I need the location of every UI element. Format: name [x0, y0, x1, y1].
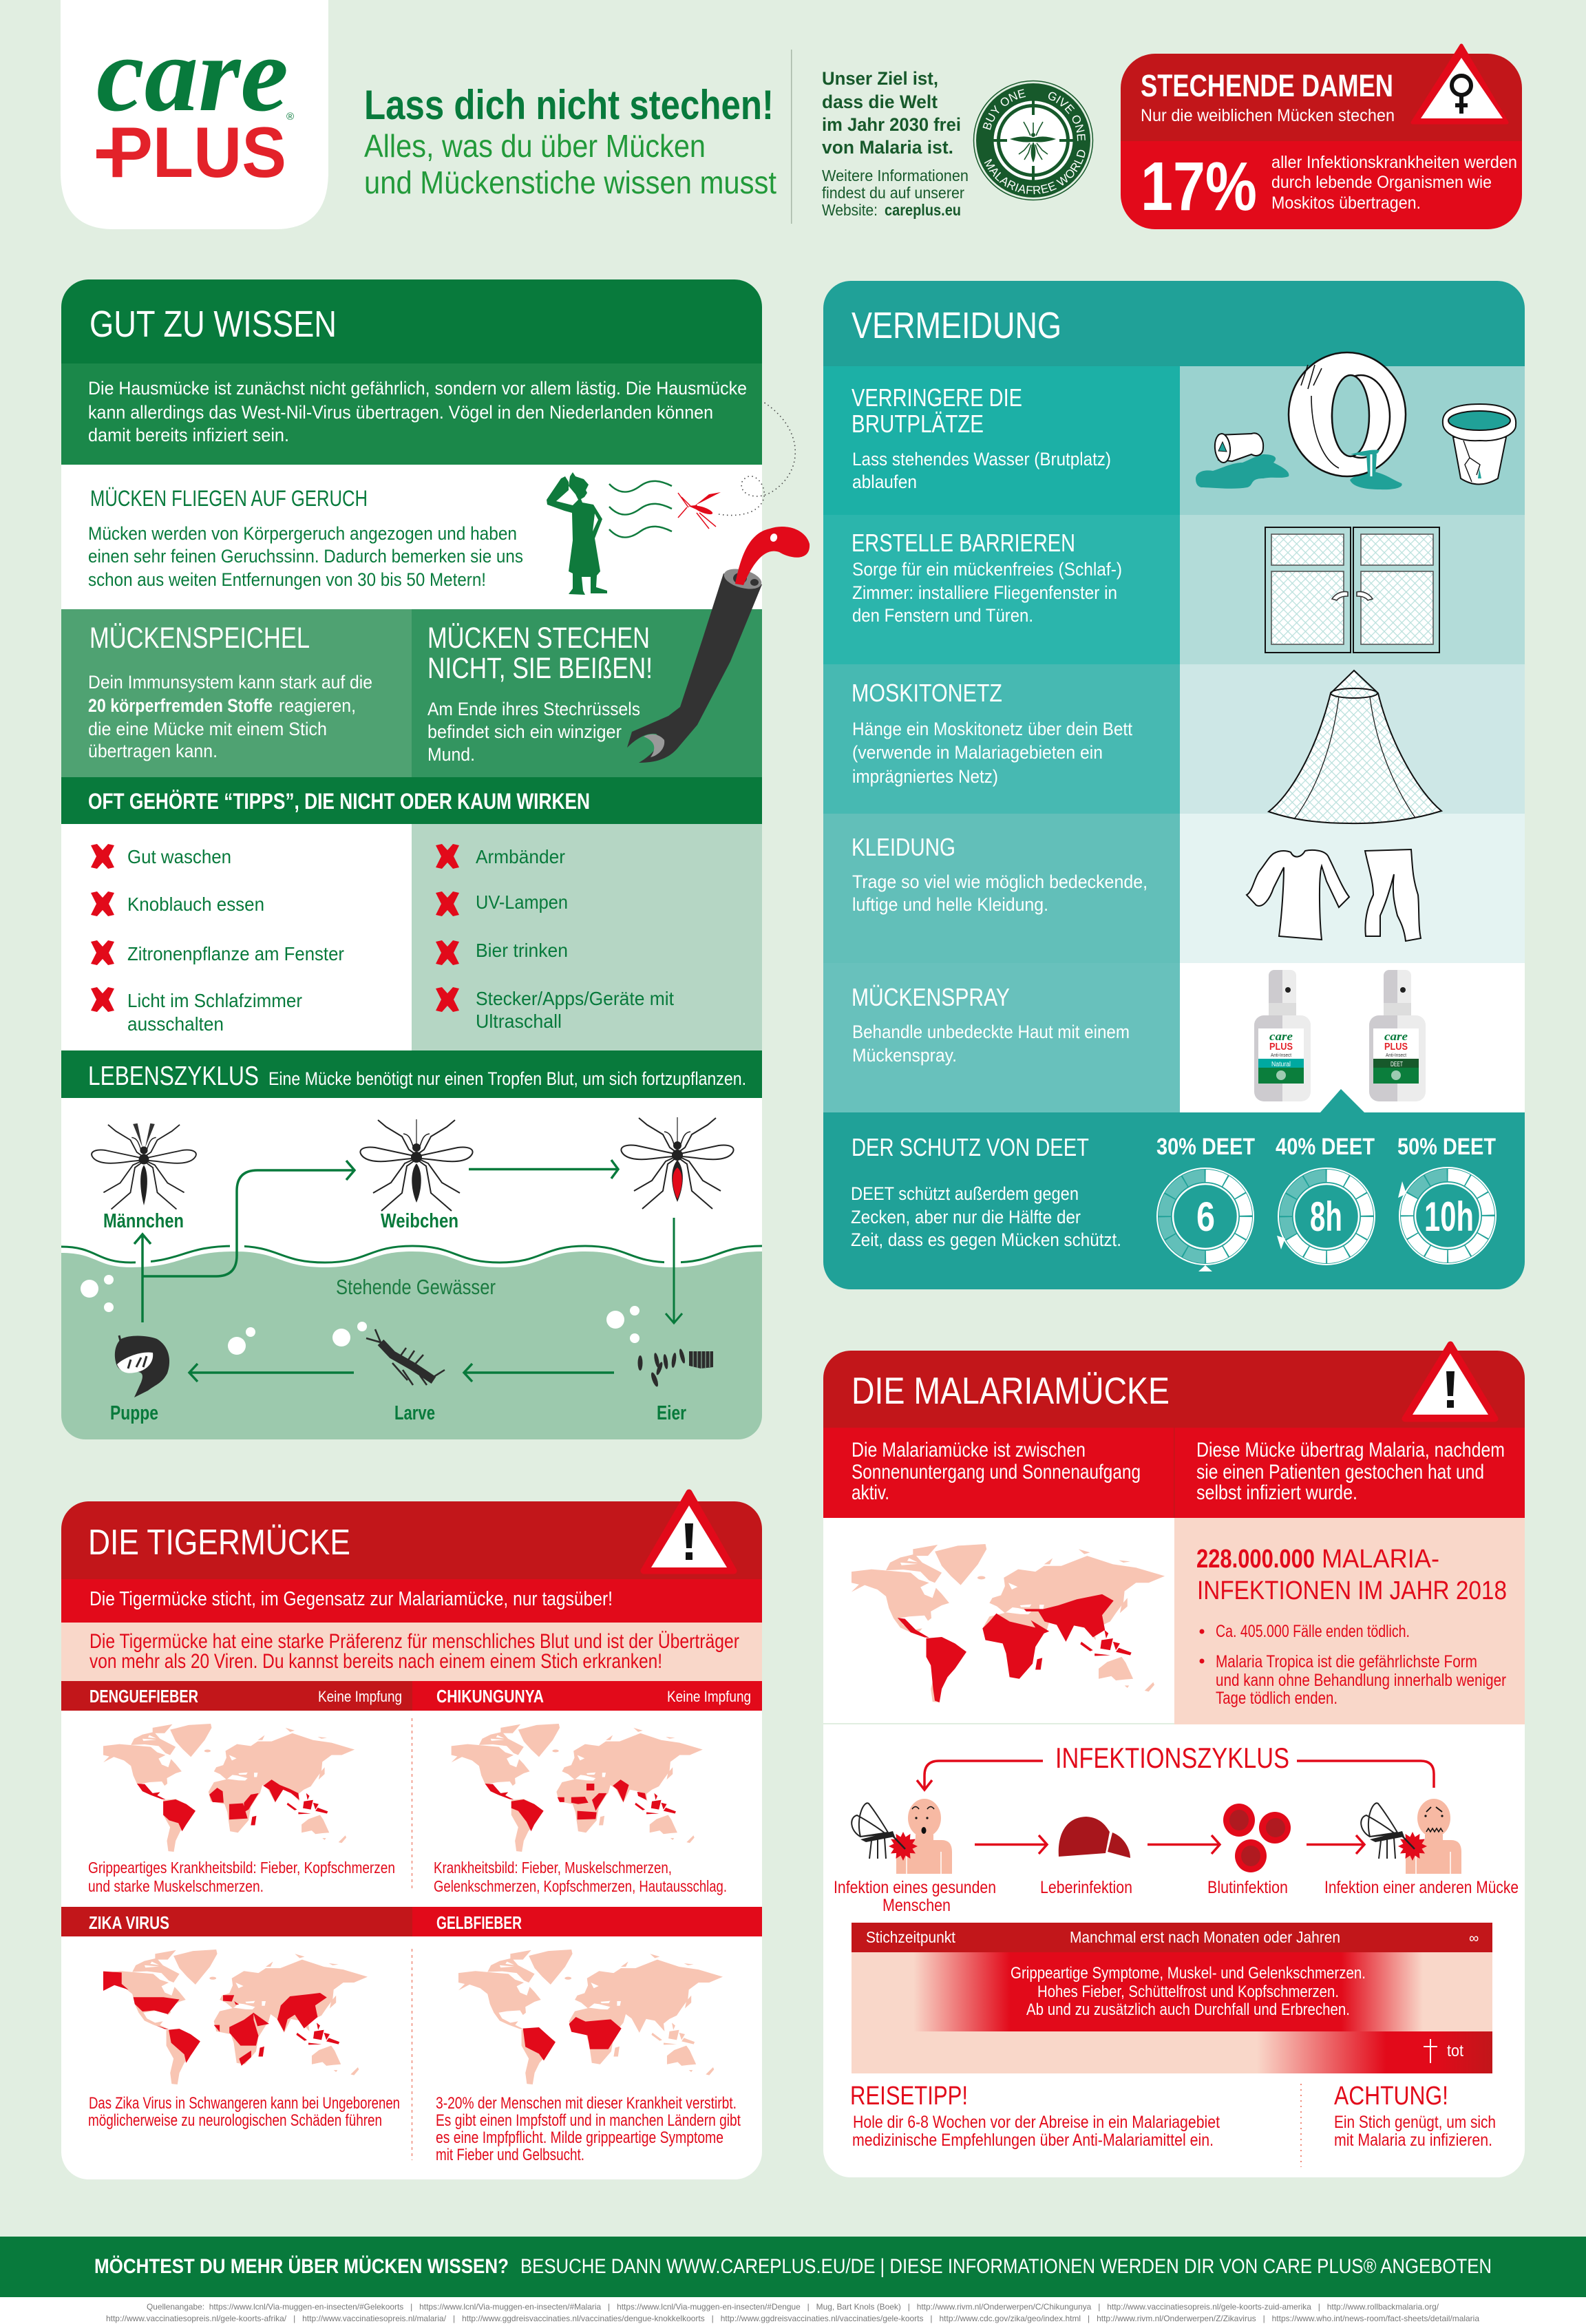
row: barrieren: Sorge für ein mückenfreies (Schlaf-) — [852, 559, 1122, 580]
row: spray: MÜCKENSPRAY — [852, 983, 1010, 1011]
block: deet: 50% DEET — [1397, 1134, 1496, 1160]
icon: tire — [1289, 352, 1406, 476]
sources — [0, 2297, 1586, 2324]
block: deet: DER SCHUTZ VON DEET — [852, 1133, 1089, 1161]
subheading: Nur die weiblichen Mücken stechen — [1141, 106, 1395, 125]
label: larve: Larve — [394, 1402, 435, 1424]
life cycle diagram — [61, 1098, 762, 1439]
badge: buy one give one: MALARIAFREE WORLD — [984, 150, 1085, 194]
stats block: 228.000.000 — [1196, 1545, 1315, 1574]
stats block: und kann ohne Behandlung innerhalb weniger — [1216, 1671, 1506, 1690]
panel: vermeidung — [823, 281, 1525, 1289]
block: geruch: Mücken werden von Körpergeruch angezogen und haben — [88, 523, 517, 544]
chart: clock 8h — [1277, 1168, 1375, 1265]
row: spray — [823, 963, 1525, 1112]
row: barrieren: ERSTELLE BARRIEREN — [852, 529, 1075, 557]
header — [61, 279, 762, 363]
icon: spray natural: Natural — [1271, 1061, 1291, 1068]
map: dengue — [103, 1724, 355, 1852]
disease: dengue: und starke Muskelschmerzen. — [88, 1877, 264, 1895]
header — [823, 1351, 1525, 1428]
stat text: durch lebende Organismen wie — [1271, 173, 1492, 192]
block: mueckenspeichel: MÜCKENSPEICHEL — [89, 622, 310, 655]
panel: stechende damen — [1121, 45, 1522, 229]
footer banner: MÖCHTEST DU MEHR ÜBER MÜCKEN WISSEN? — [94, 2255, 509, 2278]
row: moskitonetz: (verwende in Malariagebieten ein — [852, 742, 1103, 763]
row: barrieren — [823, 515, 1525, 664]
disease: dengue: DENGUEFIEBER — [89, 1686, 198, 1707]
heading: lebenszyklus: LEBENSZYKLUS — [88, 1061, 259, 1091]
icon: red mosquito — [678, 492, 721, 529]
intro block: damit bereits infiziert sein. — [88, 425, 289, 445]
timeline: tot — [1447, 2042, 1463, 2060]
tips list left: Licht im Schlafzimmer — [127, 990, 302, 1011]
tips list right: Bier trinken — [476, 940, 568, 961]
disease: gelbfieber: mit Fieber und Gelbsucht. — [436, 2146, 584, 2164]
row: moskitonetz — [823, 664, 1525, 814]
travel tip — [850, 2082, 1220, 2150]
icon: warning triangle — [1405, 1344, 1495, 1419]
arrow: to next mosquito — [1307, 1835, 1364, 1854]
headline: Lass dich nicht stechen! — [364, 82, 774, 128]
row: spray: Mückenspray. — [852, 1045, 957, 1066]
band: tagsueber: Die Tigermücke sticht, im Gegensatz zur Malariamücke, nur tagsüber! — [89, 1588, 613, 1610]
block: deet: DEET schützt außerdem gegen — [851, 1183, 1079, 1204]
disease: gelbfieber: es eine Impfpflicht. Milde grippeartige Symptome — [436, 2128, 723, 2147]
icon: mosquito net — [1269, 670, 1441, 823]
arrow: to blood meal — [469, 1160, 618, 1179]
icon: pupa — [115, 1335, 169, 1397]
row: brutplaetze: VERRINGERE DIE — [852, 383, 1022, 412]
logo: care: care — [96, 14, 288, 134]
disease: dengue — [61, 1681, 412, 1895]
header: VERMEIDUNG — [852, 305, 1061, 346]
icon: female mosquito — [360, 1119, 473, 1211]
block: geruch — [61, 465, 762, 609]
intro block: kann allerdings das West-Nil-Virus übertragen. Vögel in den Niederlanden können — [88, 402, 713, 423]
arrow: cycle left — [917, 1761, 1043, 1790]
arrow: to larva — [464, 1364, 614, 1382]
map: malaria — [823, 1518, 1174, 1723]
block: mueckenspeichel: übertragen kann. — [88, 741, 218, 761]
bubbles — [81, 1275, 639, 1355]
white body — [823, 1724, 1525, 2177]
row: kleidung — [823, 814, 1525, 963]
disease: chikungunya: CHIKUNGUNYA — [436, 1686, 544, 1707]
row: barrieren: Zimmer: installiere Fliegenfenster in — [852, 582, 1117, 603]
cycle labels: Menschen — [882, 1896, 951, 1915]
block: stechen nicht beissen: MÜCKEN STECHEN — [427, 622, 650, 655]
block: deet: 40% DEET — [1276, 1134, 1375, 1160]
map: chikungunya — [452, 1724, 703, 1852]
goal text — [822, 68, 969, 219]
tips list right: Armbänder — [476, 846, 565, 867]
warning note — [1334, 2082, 1496, 2150]
heading: tipps — [61, 777, 762, 824]
icon: clothing — [1247, 849, 1421, 941]
flight path — [719, 402, 795, 516]
tips list right: Stecker/Apps/Geräte mit — [476, 988, 674, 1009]
icon: scent waves — [609, 481, 672, 538]
cycle labels: Infektion einer anderen Mücke — [1324, 1878, 1519, 1897]
block: stechen nicht beissen: befindet sich ein winziger — [427, 721, 622, 742]
map: gelbfieber — [458, 1950, 723, 2084]
panel: die malariamuecke — [823, 1344, 1525, 2177]
row: moskitonetz: Hänge ein Moskitonetz über dein Bett — [852, 719, 1132, 739]
badge: buy one give one: BUY ONE — [983, 89, 1026, 130]
goal text: dass die Welt — [822, 92, 938, 112]
disease: gelbfieber: Es gibt einen Impfstoff und in manchen Ländern gibt — [436, 2111, 741, 2130]
disease: chikungunya: Gelenkschmerzen, Kopfschmerzen, Hautausschlag. — [434, 1877, 727, 1895]
block: mueckenspeichel: reagieren, — [279, 695, 356, 716]
headline — [364, 82, 776, 200]
row: kleidung: luftige und helle Kleidung. — [852, 894, 1048, 915]
white body — [61, 1711, 762, 2179]
block: mueckenspeichel: Dein Immunsystem kann stark auf die — [88, 672, 372, 693]
goal text: im Jahr 2030 frei — [822, 114, 961, 135]
logo panel — [61, 0, 328, 229]
row: brutplaetze — [823, 366, 1525, 515]
heading: lebenszyklus: Eine Mücke benötigt nur einen Tropfen Blut, um sich fortzupflanzen. — [268, 1068, 746, 1089]
tips list right — [412, 824, 762, 1050]
heading: STECHENDE DAMEN — [1141, 68, 1393, 103]
timeline: Stichzeitpunkt — [866, 1928, 956, 1946]
heading: lebenszyklus — [61, 1050, 762, 1098]
intro block — [61, 363, 762, 465]
panel: die tigermuecke — [61, 1492, 762, 2179]
icon: cracked pot — [1443, 404, 1516, 485]
heading: tipps: OFT GEHÖRTE “TIPPS”, DIE NICHT ODER KAUM WIRKEN — [88, 789, 590, 814]
stats block: Malaria Tropica ist die gefährlichste Form — [1216, 1652, 1477, 1671]
stats block: Tage tödlich enden. — [1216, 1689, 1337, 1708]
stats block: INFEKTIONEN IM JAHR 2018 — [1197, 1576, 1507, 1605]
block: stechen nicht beissen: NICHT, SIE BEIßEN! — [427, 652, 653, 685]
band: praeferenz: Die Tigermücke hat eine starke Präferenz für menschliches Blut und ist der Überträger — [89, 1630, 739, 1653]
row: kleidung: Trage so viel wie möglich bedeckende, — [852, 872, 1148, 892]
stat text — [1271, 153, 1517, 213]
label: weibchen: Weibchen — [381, 1210, 458, 1232]
band: activity: selbst infiziert wurde. — [1196, 1481, 1357, 1504]
icon: proboscis with drop — [627, 527, 810, 763]
chart: clock 6h: 6 — [1196, 1194, 1215, 1240]
icon: tipped cup — [1214, 433, 1263, 463]
block: geruch: schon aus weiten Entfernungen von 30 bis 50 Metern! — [88, 569, 486, 590]
goal text: careplus.eu — [885, 201, 961, 219]
disease: dengue: Keine Impfung — [318, 1688, 402, 1705]
goal text: Weitere Informationen — [822, 167, 969, 184]
sources: http://www.vaccinatiesopreis.nl/gele-koorts-afrika/ | http://www.vaccinatiesopreis.nl/malaria/ | http://www.ggdreisvaccinaties.nl/vaccinaties/dengue-knokkelkoorts | http://www.ggdreisvaccinaties.nl/vaccinaties/gele-koorts | http://www.cdc.gov/zika/geo/index.html | http://www.rivm.nl/Onderwerpen/Z/Zikavirus | https://www.who.int/news-room/fact-sheets/detail/malaria — [106, 2314, 1479, 2323]
goal text: Website: — [822, 201, 878, 219]
label: eier: Eier — [657, 1402, 686, 1424]
cycle labels: Infektion eines gesunden — [834, 1878, 996, 1897]
label: maennchen: Männchen — [103, 1210, 184, 1232]
header: GUT ZU WISSEN — [89, 304, 337, 345]
badge: buy one give one — [973, 80, 1093, 201]
arrow: to liver — [975, 1835, 1047, 1854]
map: zika — [103, 1950, 368, 2084]
chart: clock 6h — [1157, 1168, 1254, 1271]
band: activity: Diese Mücke übertrag Malaria, nachdem — [1196, 1439, 1505, 1461]
timeline: Ab und zu zusätzlich auch Durchfall und Erbrechen. — [1026, 2000, 1350, 2019]
cycle labels: Leberinfektion — [1040, 1878, 1132, 1897]
row: brutplaetze: Lass stehendes Wasser (Brutplatz) — [852, 449, 1111, 469]
timeline: ∞ — [1469, 1931, 1479, 1946]
panel: gut zu wissen — [61, 279, 810, 1439]
row: brutplaetze: BRUTPLÄTZE — [852, 410, 984, 438]
block: geruch: einen sehr feinen Geruchssinn. Dadurch bemerken sie uns — [88, 546, 523, 567]
disease: dengue: Grippeartiges Krankheitsbild: Fieber, Kopfschmerzen — [88, 1859, 395, 1877]
disease: chikungunya: Keine Impfung — [667, 1688, 751, 1705]
block: mueckenspeichel: die eine Mücke mit einem Stich — [88, 719, 327, 739]
disease: chikungunya: Krankheitsbild: Fieber, Muskelschmerzen, — [434, 1859, 672, 1877]
icon: liver — [1059, 1817, 1130, 1858]
band: praeferenz — [61, 1623, 762, 1681]
icon: healthy person bitten — [852, 1799, 952, 1874]
footer banner — [0, 2237, 1586, 2297]
heading: infektionszyklus: INFEKTIONSZYKLUS — [1055, 1742, 1289, 1774]
goal text: von Malaria ist. — [822, 137, 953, 158]
block: deet: 30% DEET — [1156, 1134, 1255, 1160]
block: stechen nicht beissen: Mund. — [427, 744, 475, 765]
headline: und Mückenstiche wissen musst — [364, 165, 776, 200]
icon: warning triangle — [644, 1492, 734, 1571]
arrow: to eggs — [666, 1218, 682, 1323]
icon: spray deet: DEET — [1391, 1061, 1403, 1068]
header: DIE TIGERMÜCKE — [88, 1523, 350, 1563]
headline: Alles, was du über Mücken — [364, 128, 706, 164]
row: kleidung: KLEIDUNG — [852, 833, 955, 861]
chart: clock 8h: 8h — [1310, 1194, 1342, 1240]
band: activity: aktiv. — [852, 1481, 889, 1504]
tips list left: Knoblauch essen — [127, 894, 264, 915]
block: deet: Zecken, aber nur die Hälfte der — [851, 1207, 1081, 1227]
goal text: Unser Ziel ist, — [822, 68, 938, 89]
icon: puddles — [1196, 454, 1402, 489]
stats block: MALARIA- — [1322, 1545, 1439, 1574]
travel tip: REISETIPP! — [850, 2082, 968, 2111]
timeline — [852, 1923, 1492, 2073]
water — [61, 1251, 762, 1439]
header — [61, 1501, 762, 1579]
icon: male mosquito — [92, 1123, 196, 1209]
tips list left: Gut waschen — [127, 846, 231, 867]
warning note: mit Malaria zu infizieren. — [1334, 2131, 1492, 2150]
block: mueckenspeichel — [61, 609, 412, 777]
label: puppe: Puppe — [110, 1402, 158, 1424]
stat: 17%: 17% — [1141, 148, 1257, 225]
header: DIE MALARIAMÜCKE — [852, 1369, 1170, 1412]
block: stechen nicht beissen: Am Ende ihres Stechrüssels — [427, 699, 640, 719]
block: deet: Zeit, dass es gegen Mücken schützt. — [851, 1229, 1121, 1250]
stat text: Moskitos übertragen. — [1271, 193, 1421, 213]
timeline: Grippeartige Symptome, Muskel- und Gelenkschmerzen. — [1011, 1964, 1366, 1983]
tips list left: ausschalten — [127, 1013, 224, 1035]
icon: window with screens — [1265, 527, 1439, 653]
goal text: findest du auf unserer — [822, 184, 964, 202]
arrow: to female — [142, 1161, 355, 1276]
tips list right: Ultraschall — [476, 1011, 562, 1032]
timeline: Hohes Fieber, Schüttelfrost und Kopfschmerzen. — [1037, 1983, 1339, 2001]
cycle labels: Blutinfektion — [1207, 1878, 1288, 1897]
header — [823, 281, 1525, 366]
arrow: cycle right — [1297, 1761, 1434, 1788]
band: activity: Die Malariamücke ist zwischen — [852, 1439, 1086, 1461]
block: deet — [823, 1089, 1525, 1289]
logo: PLUS: PLUS — [108, 113, 286, 193]
row: moskitonetz: imprägniertes Netz) — [852, 766, 998, 787]
disease: chikungunya — [412, 1681, 762, 1895]
warning note: ACHTUNG! — [1334, 2082, 1448, 2111]
band: tagsueber — [61, 1579, 762, 1623]
row: brutplaetze: ablaufen — [852, 472, 917, 492]
disease: zika — [61, 1907, 412, 2130]
cycle labels — [834, 1878, 1519, 1915]
icon: warning female — [1413, 45, 1507, 123]
disease: gelbfieber — [412, 1907, 762, 2164]
stat text: aller Infektionskrankheiten werden — [1271, 153, 1517, 172]
tips list left: Zitronenpflanze am Fenster — [127, 943, 344, 964]
intro block: Die Hausmücke ist zunächst nicht gefährlich, sondern vor allem lästig. Die Hausmücke — [88, 378, 747, 399]
band: activity — [823, 1428, 1525, 1518]
disease: gelbfieber: GELBFIEBER — [436, 1912, 522, 1933]
chart: clock 10h: 10h — [1424, 1194, 1474, 1240]
block: geruch: MÜCKEN FLIEGEN AUF GERUCH — [90, 486, 368, 511]
band: praeferenz: von mehr als 20 Viren. Du kannst bereits nach einem einem Stich erkranken! — [89, 1650, 662, 1673]
band: activity: sie einen Patienten gestochen hat und — [1196, 1461, 1484, 1483]
arrow: to pupa — [189, 1364, 354, 1382]
icon: blood fed mosquito — [621, 1117, 734, 1209]
travel tip: Hole dir 6-8 Wochen vor der Abreise in ein Malariagebiet — [853, 2113, 1220, 2132]
disease: zika: Das Zika Virus in Schwangeren kann bei Ungeborenen — [89, 2094, 400, 2113]
timeline: Manchmal erst nach Monaten oder Jahren — [1070, 1928, 1340, 1946]
stats block — [1174, 1518, 1525, 1724]
arrow: to blood — [1148, 1835, 1220, 1854]
disease: zika: ZIKA VIRUS — [89, 1912, 169, 1933]
sources: Quellenangabe: https://www.lcnl/Via-muggen-en-insecten/#Gelekoorts | https://www.lcnl/Via-muggen-en-insecten/#Malaria | https://www.lcnl/Via-muggen-en-insecten/#Dengue | Mug, Bart Knols (Boek) | http://www.rivm.nl/Onderwerpen/C/Chikungunya | http://www.vaccinatiesopreis.nl/gele-koorts-zuid-amerika | http://www.rollbackmalaria.org/ — [147, 2302, 1439, 2312]
disease: zika: möglicherweise zu neurologischen Schäden führen — [88, 2111, 382, 2130]
block: mueckenspeichel: 20 körperfremden Stoffe — [88, 695, 273, 716]
tips list left — [61, 824, 412, 1050]
chart: clock 10h — [1398, 1168, 1496, 1264]
icon: larva — [366, 1329, 445, 1385]
row: moskitonetz: MOSKITONETZ — [852, 679, 1002, 707]
row: barrieren: den Fenstern und Türen. — [852, 605, 1033, 626]
disease: gelbfieber: 3-20% der Menschen mit dieser Krankheit verstirbt. — [436, 2094, 737, 2113]
icon: person smelling — [547, 472, 607, 595]
icon: spray natural — [1254, 970, 1311, 1101]
stats block: Ca. 405.000 Fälle enden tödlich. — [1216, 1622, 1410, 1641]
block: stechen nicht beissen — [412, 609, 762, 777]
icon: spray deet — [1369, 970, 1426, 1101]
icon: blood cells — [1223, 1804, 1291, 1872]
tips list right: UV-Lampen — [476, 891, 568, 913]
arrow: male up — [134, 1234, 151, 1322]
warning note: Ein Stich genügt, um sich — [1334, 2113, 1496, 2132]
row: spray: Behandle unbedeckte Haut mit einem — [852, 1022, 1130, 1042]
label: stehende gewaesser: Stehende Gewässer — [336, 1275, 496, 1299]
travel tip: medizinische Empfehlungen über Anti-Malariamittel ein. — [852, 2131, 1214, 2150]
band: activity: Sonnenuntergang und Sonnenaufgang — [852, 1461, 1141, 1483]
badge: buy one give one: GIVE ONE — [1048, 92, 1086, 141]
icon: infected person bitten — [1361, 1799, 1461, 1874]
logo: registered mark: ® — [286, 111, 294, 123]
icon: eggs — [637, 1349, 713, 1388]
